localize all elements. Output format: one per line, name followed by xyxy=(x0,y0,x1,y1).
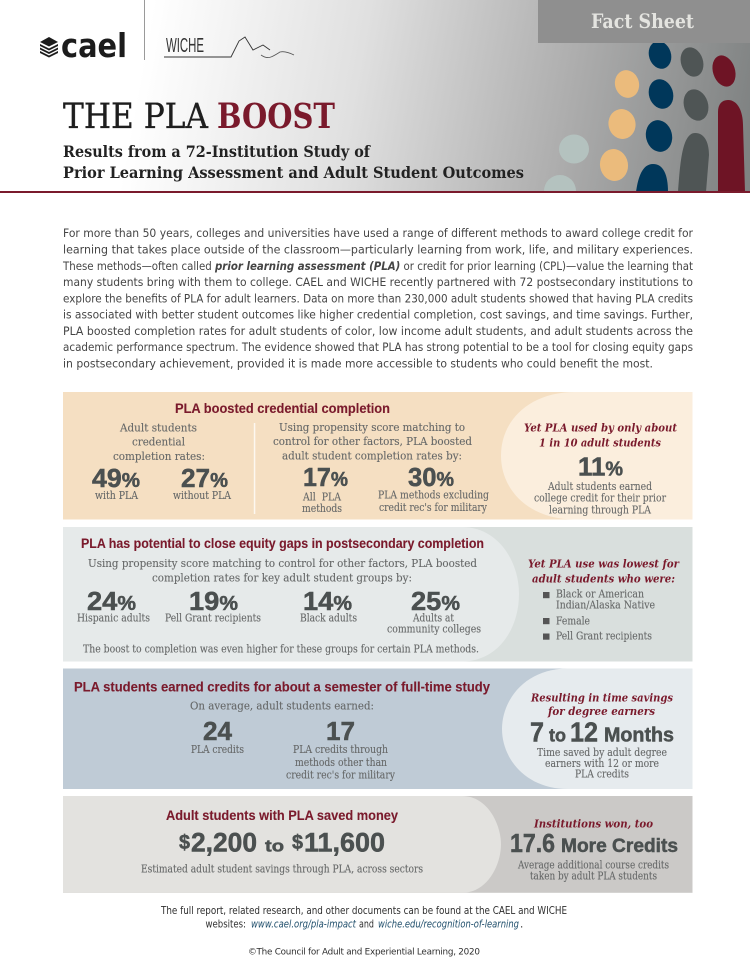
intro paragraph: learning that takes place outside of the classroom—particularly learning from work, life, and military experiences. xyxy=(63,242,693,256)
stat: 24% Hispanic adults: 24% xyxy=(87,586,136,616)
stat: 19% Pell Grant recipients xyxy=(165,586,261,625)
footer note: . xyxy=(520,919,523,931)
copyright: ©The Council for Adult and Experiential Learning, 2020 xyxy=(248,947,480,957)
panel: credits earned xyxy=(63,668,692,789)
callout: time savings: 12 xyxy=(570,717,598,748)
callout: institutions won: More Credits xyxy=(561,835,678,857)
stat: 19% Pell Grant recipients: Pell Grant recipients xyxy=(165,612,261,625)
callout: 1 in 10: Adult students earned xyxy=(547,480,652,493)
callout: time savings: to xyxy=(549,726,566,746)
callout: institutions won: Institutions won, too xyxy=(533,816,653,830)
intro paragraph: in postsecondary achievement, provided it is made more accessible to students who could benefit the most. xyxy=(63,356,653,370)
completion rates intro: credential xyxy=(132,436,186,448)
intro: Using propensity score matching to control for other factors, PLA boosted xyxy=(88,556,478,570)
callout: time savings: earners with 12 or more xyxy=(545,757,659,770)
footer note: www.cael.org/pla-impact xyxy=(251,919,357,931)
subtitle: Results from a 72-Institution Study of xyxy=(63,142,371,161)
stat: 14% Black adults: 14% xyxy=(303,586,352,616)
stat: 25% community colleges xyxy=(387,586,481,636)
stat: 17 PLA credits other xyxy=(286,716,396,782)
stat: 17% all PLA methods: All PLA xyxy=(302,490,341,504)
heading: Adult students with PLA saved money xyxy=(166,808,399,823)
footer note: wiche.edu/recognition-of-learning xyxy=(378,919,519,931)
callout: time savings xyxy=(530,691,674,781)
callout: lowest PLA use xyxy=(528,557,680,643)
bullet list: Female xyxy=(556,614,590,627)
callout: lowest PLA use: adult students who were: xyxy=(532,571,675,585)
callout: institutions won: Average additional course credits xyxy=(517,858,669,871)
fact sheet tab xyxy=(538,0,750,43)
savings figure: to xyxy=(265,837,284,856)
stat: 17% all PLA methods xyxy=(302,462,348,515)
logo: CAEL xyxy=(40,26,127,65)
icon: book stack xyxy=(40,37,58,58)
stat: 17 PLA credits other: 17 xyxy=(326,716,355,746)
stat: 30% excluding military: PLA methods excluding xyxy=(378,488,489,502)
intro paragraph: These methods—often called prior learning assessment (PLA) or credit for prior learning (CPL)—value the learning that xyxy=(62,259,693,273)
callout: time savings: PLA credits xyxy=(575,768,629,781)
stat: 30% excluding military xyxy=(378,462,489,514)
logo: WICHE: WICHE xyxy=(166,35,204,57)
callout: time savings: 7 xyxy=(530,717,544,748)
stat: 24% Hispanic adults: Hispanic adults xyxy=(77,612,150,625)
heading: PLA boosted credential completion xyxy=(175,401,390,416)
logo: CAEL: cael xyxy=(61,26,127,65)
completion rates intro: completion rates: xyxy=(113,450,205,463)
stat: 25% community colleges: Adults at xyxy=(412,612,455,625)
savings figure: $ xyxy=(179,832,190,854)
intro paragraph: PLA boosted completion rates for adult students of color, low income adult students, and adult students across the xyxy=(63,324,693,338)
heading: PLA has potential to close equity gaps in postsecondary completion xyxy=(81,536,484,551)
intro paragraph: For more than 50 years, colleges and universities have used a range of different methods to award college credit for xyxy=(63,226,693,240)
bullet list xyxy=(543,588,655,643)
stat: 27% without PLA: 27% xyxy=(181,463,228,493)
matching intro: Using propensity score matching to xyxy=(279,421,465,434)
bullet list: Pell Grant recipients xyxy=(556,630,652,643)
people dots graphic xyxy=(544,43,745,191)
panel: saved money xyxy=(63,796,692,893)
matching intro: control for other factors, PLA boosted xyxy=(273,435,472,448)
callout: institutions won: taken by adult PLA students xyxy=(530,869,657,882)
stat: 17% all PLA methods: methods xyxy=(302,502,342,515)
stat: 17 PLA credits other: credit rec's for military xyxy=(286,769,396,782)
callout: time savings: Time saved by adult degree xyxy=(537,746,667,759)
stat: 24 PLA credits: 24 xyxy=(203,716,233,746)
stat: 27% without PLA xyxy=(173,463,231,502)
stat: 24 PLA credits: PLA credits xyxy=(191,743,244,756)
callout: 1 in 10 xyxy=(524,421,678,517)
savings caption: Estimated adult student savings through PLA, across sectors xyxy=(141,863,423,876)
callout: time savings: Resulting in time savings xyxy=(530,691,674,705)
subtitle: Prior Learning Assessment and Adult Student Outcomes xyxy=(63,163,524,182)
savings figure: $ xyxy=(292,832,303,854)
subtitle xyxy=(63,142,524,182)
stat: 14% Black adults xyxy=(300,586,357,625)
stat: 17 PLA credits other: methods other than xyxy=(295,756,387,769)
matching intro xyxy=(273,421,472,462)
stat: 30% excluding military: credit rec's for military xyxy=(379,501,488,514)
callout: 1 in 10: 1 in 10 adult students xyxy=(539,436,662,450)
stat: 25% community colleges: community colleges xyxy=(387,623,481,636)
callout: 1 in 10: learning through PLA xyxy=(549,504,651,517)
intro xyxy=(88,556,478,585)
callout: institutions won xyxy=(510,816,678,882)
stat: 19% Pell Grant recipients: 19% xyxy=(189,586,238,616)
stat: 49% with PLA: with PLA xyxy=(95,489,138,502)
footer note xyxy=(160,905,567,931)
stat: 17% all PLA methods: 17% xyxy=(303,462,348,492)
callout: institutions won: 17.6 xyxy=(510,828,555,858)
fact sheet tab: Fact Sheet xyxy=(591,9,695,33)
bullet list: Black or American xyxy=(556,588,644,601)
callout: 1 in 10: college credit for their prior xyxy=(534,492,667,505)
footer note: websites: xyxy=(206,919,246,931)
stat: 14% Black adults: Black adults xyxy=(300,612,357,625)
stat: 24% Hispanic adults xyxy=(77,586,150,625)
panel: credential completion xyxy=(63,392,692,520)
stat: 17 PLA credits other: PLA credits through xyxy=(293,743,388,756)
completion rates intro xyxy=(113,422,205,463)
intro: On average, adult students earned: xyxy=(190,700,374,713)
footer note: The full report, related research, and other documents can be found at the CAEL and WICHE xyxy=(160,905,567,917)
intro paragraph: is associated with better student outcomes like higher credential completion, cost savings, and time savings. Further, xyxy=(63,308,693,322)
intro: completion rates for key adult student groups by: xyxy=(152,571,412,585)
savings figure: 11,600 xyxy=(304,828,385,858)
savings figure: 2,200 xyxy=(191,828,257,858)
heading: PLA students earned credits for about a semester of full-time study xyxy=(74,680,491,695)
intro paragraph: many students bring with them to college. CAEL and WICHE recently partnered with 72 postsecondary institutions to xyxy=(63,275,693,289)
title xyxy=(63,96,335,137)
intro paragraph: academic performance spectrum. The evidence showed that PLA has strong potential to be a tool for closing equity gaps xyxy=(63,340,693,354)
title: THE PLA xyxy=(63,97,209,137)
stat: 30% excluding military: 30% xyxy=(408,462,454,492)
panel: equity gaps xyxy=(63,527,692,662)
callout: time savings: for degree earners xyxy=(547,704,656,718)
matching intro: adult student completion rates by: xyxy=(282,450,462,462)
title: BOOST xyxy=(217,96,335,137)
footer note: and xyxy=(359,919,374,931)
savings figure xyxy=(179,828,385,858)
bullet list: Indian/Alaska Native xyxy=(556,599,655,612)
intro paragraph xyxy=(62,226,693,370)
callout: 1 in 10: Yet PLA used by only about xyxy=(524,421,678,435)
stat: 49% with PLA: 49% xyxy=(92,463,140,493)
intro paragraph: explore the benefits of PLA for adult learners. Data on more than 230,000 adult students showed that having PLA credits xyxy=(63,292,693,306)
stat: 25% community colleges: 25% xyxy=(411,586,460,616)
completion rates intro: Adult students xyxy=(119,422,197,434)
note: The boost to completion was even higher for these groups for certain PLA methods. xyxy=(83,643,479,656)
stat: 24 PLA credits xyxy=(191,716,244,756)
callout: time savings: Months xyxy=(604,725,674,747)
callout: 1 in 10: 11% xyxy=(578,452,623,482)
logo: WICHE xyxy=(164,35,294,58)
header banner xyxy=(0,0,750,207)
stat: 27% without PLA: without PLA xyxy=(173,489,231,502)
callout: lowest PLA use: Yet PLA use was lowest for xyxy=(528,557,680,571)
